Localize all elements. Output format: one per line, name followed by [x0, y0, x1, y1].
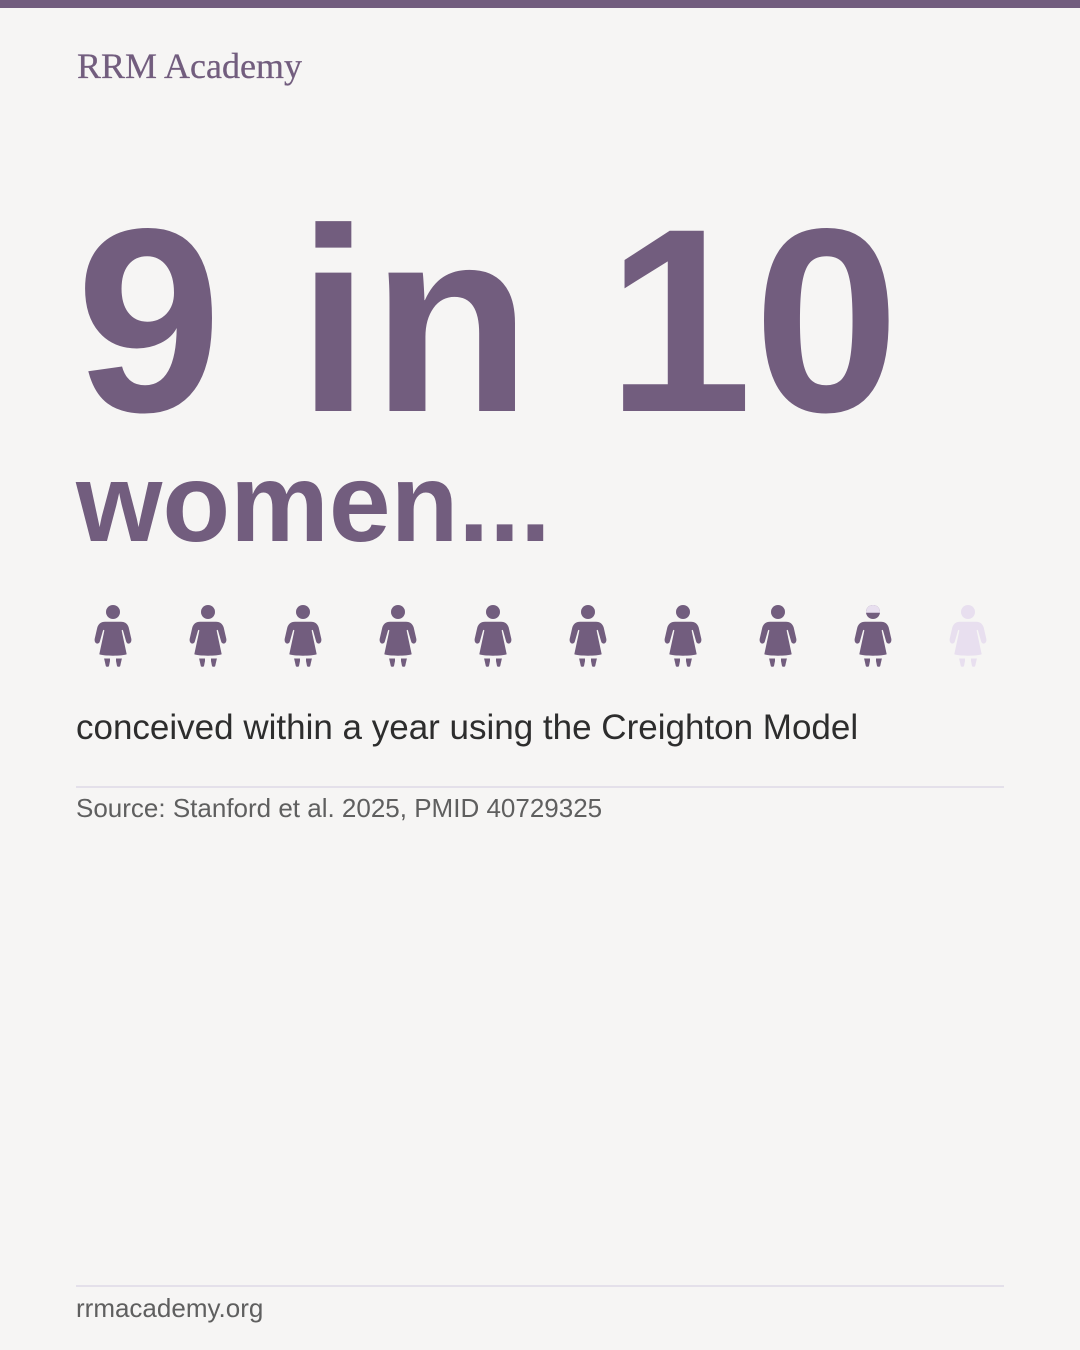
footer url: rrmacademy.org [76, 1293, 263, 1323]
icon: woman 10, unfilled [950, 605, 986, 667]
headline: 9 in 10: 9 in 10 [76, 174, 901, 467]
icon: woman 7 [665, 605, 701, 667]
top bar [0, 0, 1080, 8]
icon: woman 6 [570, 605, 606, 667]
icon: woman 4 [380, 605, 416, 667]
icon: woman 5 [475, 605, 511, 667]
icon: woman 9, partly filled [855, 605, 891, 667]
subheading: women: women... [76, 441, 551, 565]
icon: woman 1 [95, 605, 131, 667]
pictogram: 9 of 10 women [94, 605, 986, 667]
icon: woman 3 [285, 605, 321, 667]
source citation: Source: Stanford et al. 2025, PMID 40729325 [76, 793, 602, 823]
icon: woman 8 [760, 605, 796, 667]
description text: conceived within a year using the Creighton Model [76, 708, 858, 747]
brand name: RRM Academy [77, 46, 302, 86]
icon: woman 2 [190, 605, 226, 667]
